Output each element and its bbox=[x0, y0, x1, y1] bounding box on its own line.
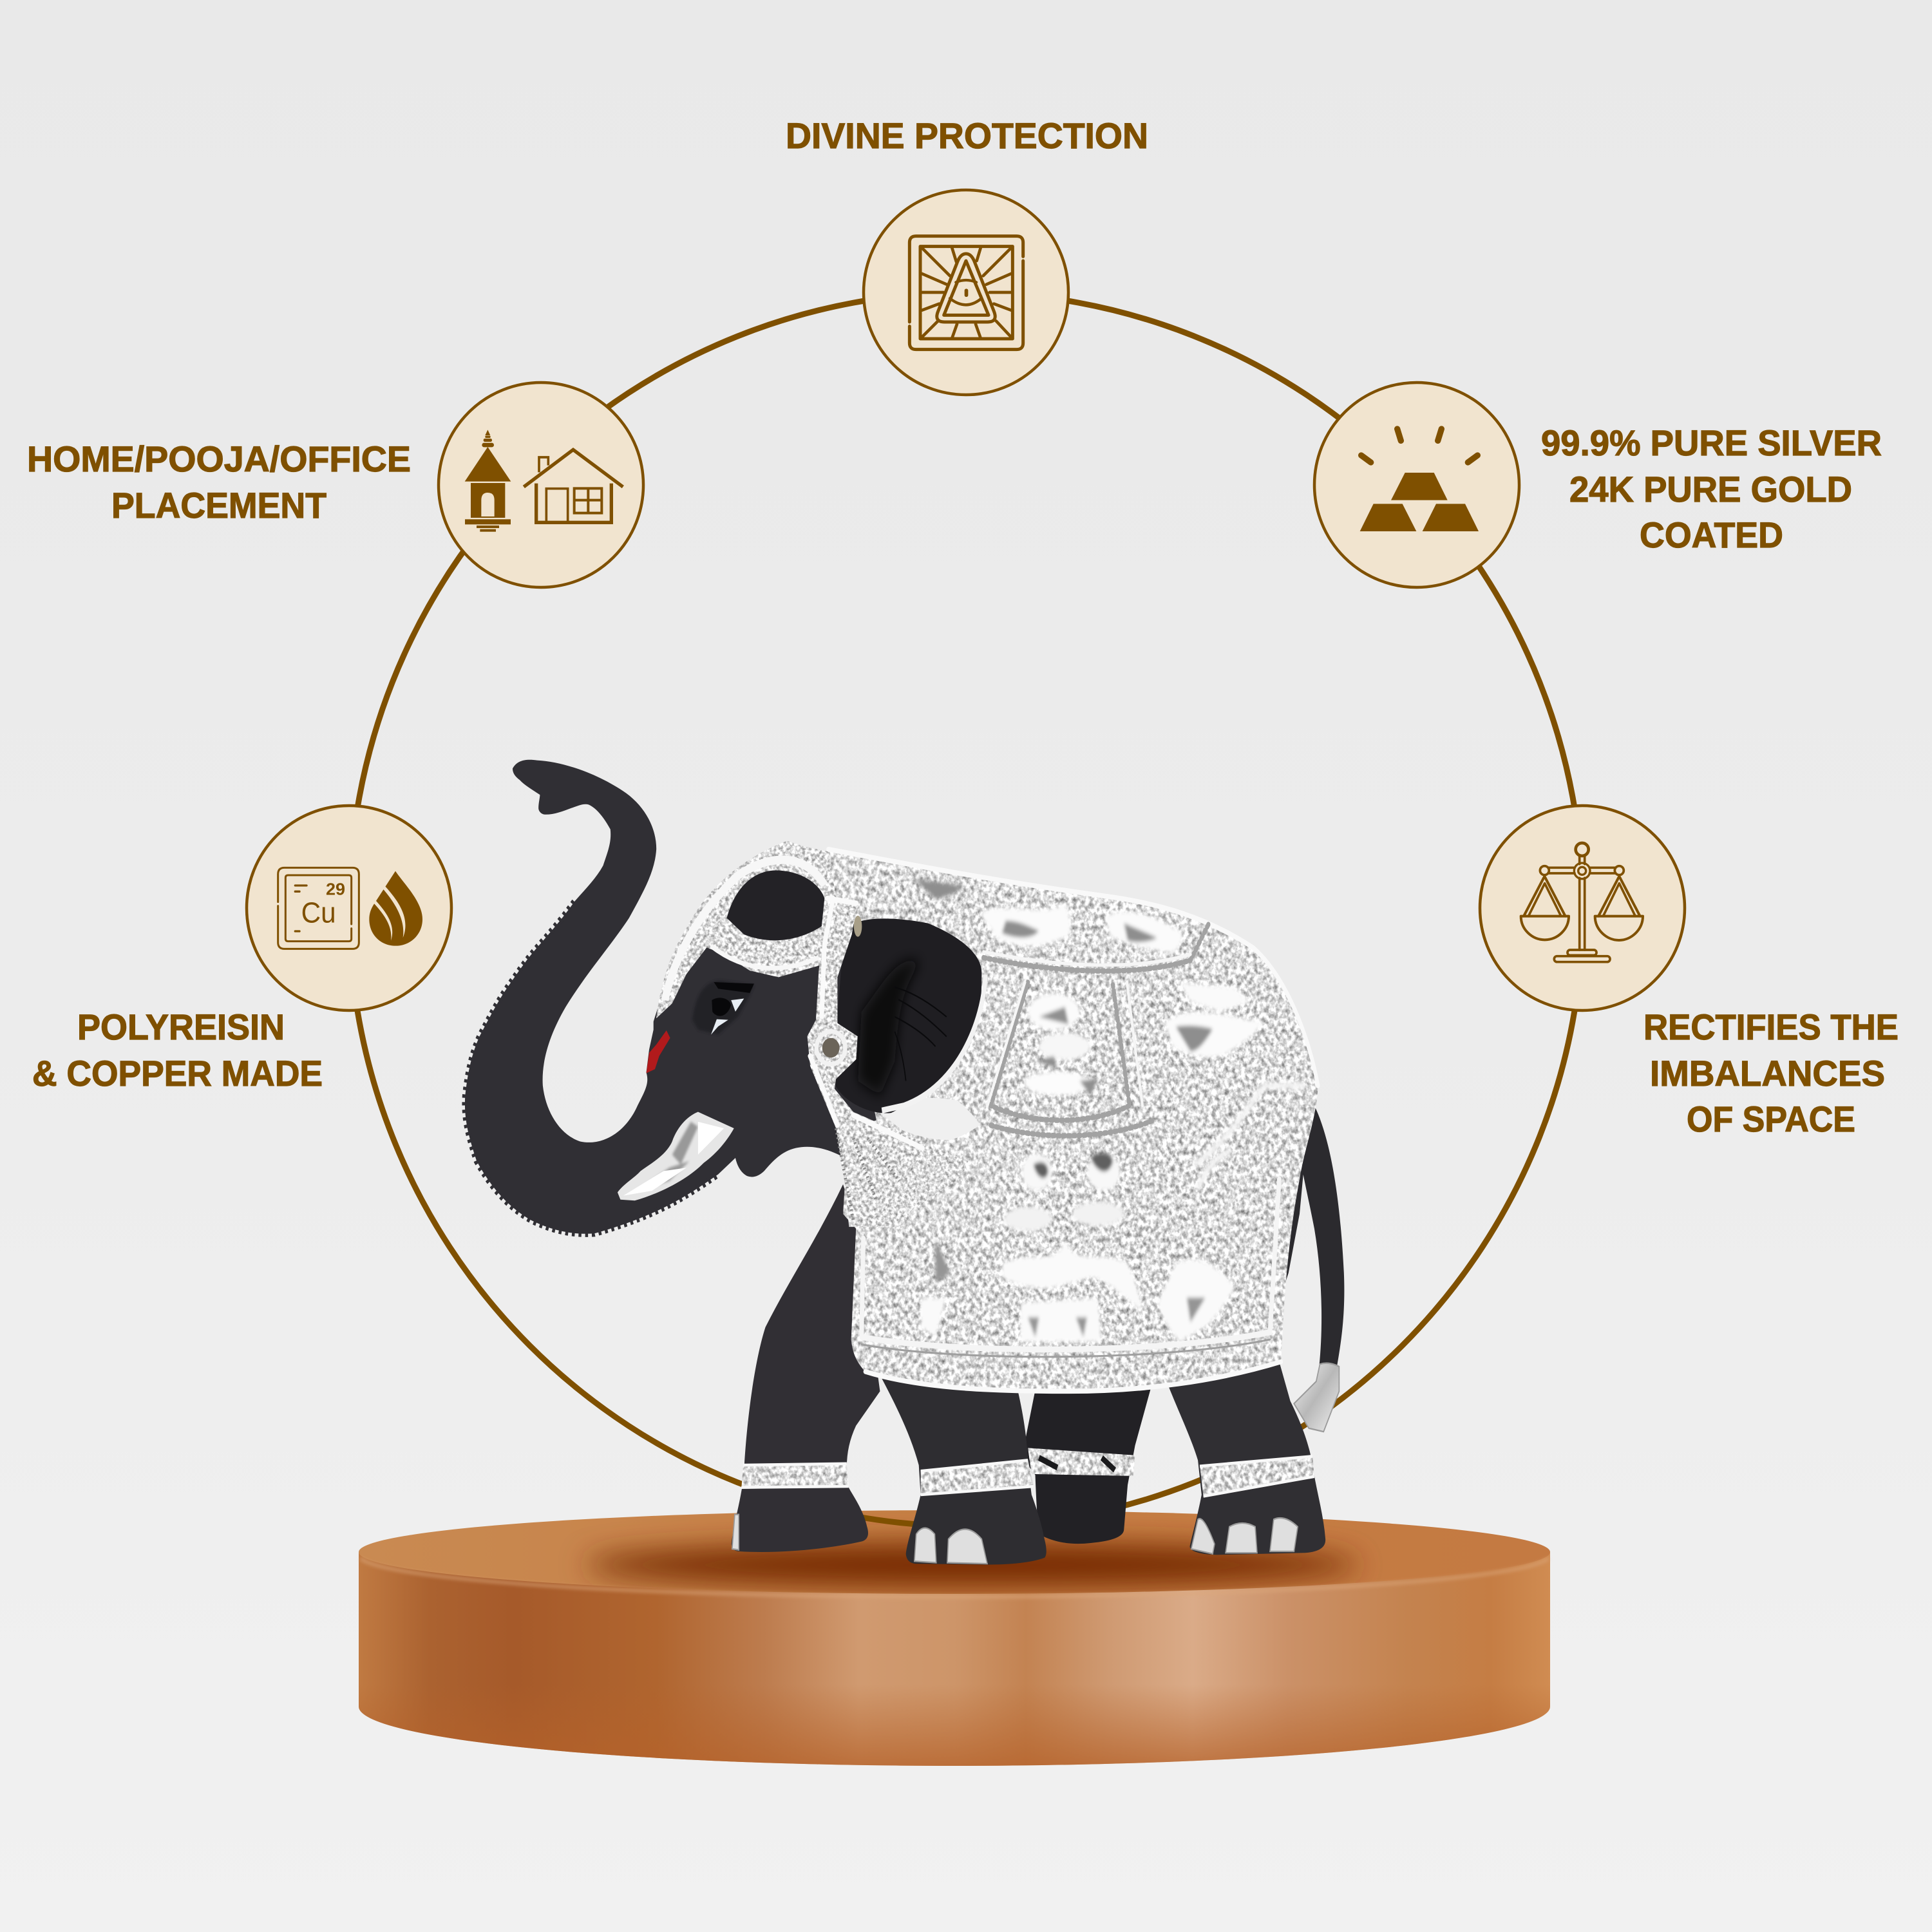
heading: home pooja office: HOME/POOJA/OFFICE bbox=[27, 439, 411, 479]
pedestal bbox=[359, 1510, 1550, 1766]
trunk and head bbox=[465, 760, 902, 1234]
icon circle: balance scales bbox=[1480, 806, 1685, 1010]
blanket edge and rope borders bbox=[828, 849, 1318, 1391]
feature: pure silver and gold bbox=[1314, 383, 1882, 587]
feature: divine protection bbox=[786, 115, 1148, 395]
heading: home pooja office bbox=[27, 439, 411, 526]
icon circle: copper element and drop: Cu bbox=[301, 896, 336, 929]
feature: rectifies imbalances bbox=[1480, 806, 1899, 1139]
side strap and tassel bbox=[808, 895, 969, 1227]
icon circle: copper element and drop bbox=[247, 806, 451, 1010]
ear edge trim bbox=[882, 975, 985, 1110]
legs bbox=[732, 1184, 1325, 1565]
heading: rectifies the imbalances of space bbox=[1643, 1007, 1899, 1139]
tail tip bbox=[1294, 1363, 1339, 1432]
rear tail and body bbox=[1268, 1106, 1344, 1369]
heading: divine protection: DIVINE PROTECTION bbox=[786, 115, 1148, 156]
icon circle: temple and house bbox=[439, 383, 643, 587]
heading: polyreisin copper made: & COPPER MADE bbox=[32, 1053, 323, 1094]
heading: rectifies the imbalances of space: IMBALANCES bbox=[1650, 1053, 1885, 1094]
icon circle: copper element and drop: 29 bbox=[326, 879, 345, 898]
trunk ribs bbox=[465, 902, 718, 1234]
head dome bbox=[727, 871, 824, 940]
lobe under the ear bbox=[880, 1098, 980, 1140]
heading: pure silver gold coated bbox=[1541, 422, 1882, 555]
toenails bbox=[732, 1515, 1298, 1564]
relief figures bbox=[913, 879, 1305, 1342]
tusk bbox=[618, 1112, 734, 1200]
ear bbox=[828, 918, 981, 1113]
tilak mark bbox=[647, 1030, 670, 1073]
decorated silver blanket bbox=[828, 849, 1339, 1432]
feature: polyresin and copper bbox=[32, 806, 451, 1094]
elephant figurine bbox=[465, 760, 1344, 1565]
heading: polyreisin copper made: POLYREISIN bbox=[77, 1007, 285, 1047]
forehead headpiece bbox=[656, 841, 902, 1018]
eye bbox=[692, 980, 754, 1035]
heading: rectifies the imbalances of space: RECTIFIES THE bbox=[1643, 1007, 1899, 1047]
heading: pure silver gold coated: 99.9% PURE SILVER bbox=[1541, 422, 1882, 463]
heading: pure silver gold coated: COATED bbox=[1640, 515, 1783, 555]
circular ring connector bbox=[349, 292, 1583, 1526]
heading: home pooja office: PLACEMENT bbox=[111, 485, 327, 526]
icon circle: gold bars bbox=[1314, 383, 1519, 587]
feature: home pooja office placement bbox=[27, 383, 643, 587]
ankle bands bbox=[741, 1448, 1314, 1497]
heading: pure silver gold coated: 24K PURE GOLD bbox=[1569, 469, 1852, 509]
icon circle: all-seeing eye bbox=[864, 190, 1068, 395]
heading: rectifies the imbalances of space: OF SPACE bbox=[1687, 1099, 1855, 1139]
heading: polyreisin copper made bbox=[32, 1007, 323, 1094]
